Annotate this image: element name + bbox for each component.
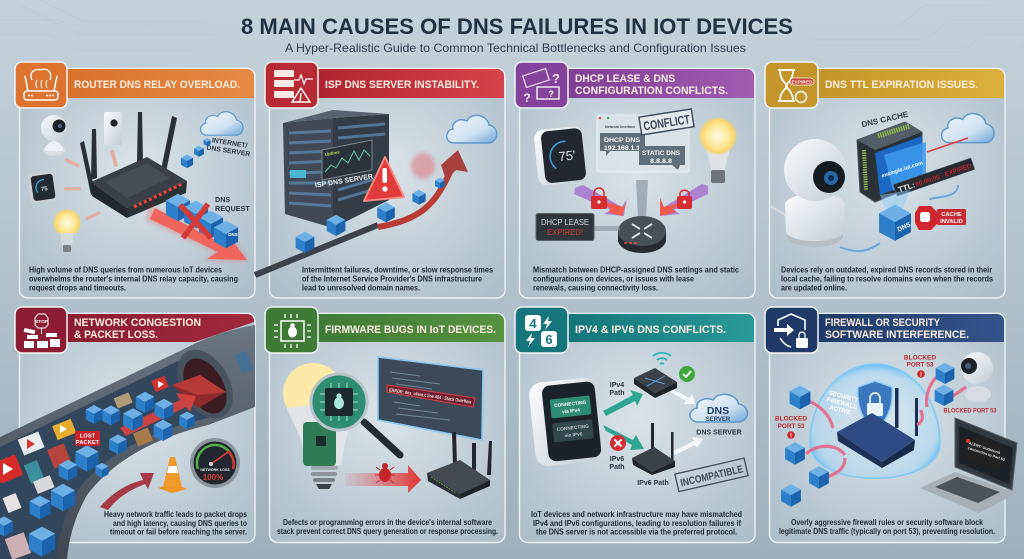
icon: light bulb xyxy=(53,209,81,252)
labels: paths: IPv6 Path xyxy=(637,480,669,487)
gauge: network loss: NETWORK LOSS xyxy=(200,468,230,472)
description: ISP instability: lead to unresolved domain names. xyxy=(302,282,420,292)
icon: laptop: ALERT: Outbound xyxy=(968,441,1001,455)
icon: 4 and 6: 6 xyxy=(545,332,553,347)
icon: network cards: ? xyxy=(552,71,560,86)
icon: device with connecting screens: via IPv4 xyxy=(562,407,581,415)
icon: device with connecting screens: CONNECTING xyxy=(556,424,589,433)
red X xyxy=(180,204,211,238)
red failure arrow xyxy=(378,150,468,227)
icon: thermostat xyxy=(533,126,588,186)
description: TTL expiry: are updated online. xyxy=(781,282,847,292)
dropped DNS request cubes xyxy=(166,194,238,248)
description: router overload xyxy=(29,264,238,292)
red overflow arrow xyxy=(146,205,248,261)
icon: router xyxy=(80,112,187,218)
label: blocked port left: PORT 53 xyxy=(777,423,805,430)
panel: router DNS relay overload xyxy=(15,62,255,298)
illustration: congested tube xyxy=(0,325,255,559)
icon: thermostat xyxy=(27,170,57,204)
icon: device with connecting screens xyxy=(528,377,602,467)
teal arrows xyxy=(603,390,644,450)
heading: router DNS relay overload: ROUTER DNS RELAY OVERLOAD. xyxy=(74,79,240,91)
icon: network cards: ? xyxy=(548,89,554,99)
illustration: firmware xyxy=(283,357,492,499)
label: blocked port left xyxy=(775,416,807,440)
labels: paths: Path xyxy=(609,390,625,397)
label: security firewall active: FIREWALL xyxy=(826,397,858,411)
description: DHCP conflict xyxy=(533,264,739,292)
chart: uptime monitor: Uptime xyxy=(324,149,341,157)
icon: thermostat: 75 xyxy=(41,186,49,193)
heading: network congestion xyxy=(74,317,201,341)
glow beam xyxy=(880,190,910,215)
label: blocked port top xyxy=(904,354,936,378)
illustration: ISP server xyxy=(255,110,497,275)
icon: large camera xyxy=(769,139,846,247)
description: TTL expiry xyxy=(781,264,993,292)
label: DNS cache: DNS CACHE xyxy=(861,110,910,129)
icon: cloud internet xyxy=(201,112,243,135)
network interface window xyxy=(597,109,694,172)
description: DHCP conflict: renewals, causing connectivity loss. xyxy=(533,282,658,292)
description: network congestion: Heavy network traffic leads to packet drops xyxy=(104,509,247,519)
tube interior xyxy=(0,361,212,559)
icon: laptop xyxy=(920,418,1017,513)
callout: static DNS: STATIC DNS xyxy=(642,150,681,157)
description: DHCP conflict: Mismatch between DHCP-assigned DNS settings and static xyxy=(533,264,739,274)
illustration: router overload xyxy=(27,112,252,261)
label: DNS server: DNS SERVER xyxy=(696,430,742,436)
icon: DNS server cloud: DNS xyxy=(707,405,729,417)
stamp: conflict: CONFLICT xyxy=(642,112,691,133)
panel: IPv4 and IPv6 conflicts xyxy=(515,307,755,542)
DNS request cube xyxy=(879,205,913,241)
heading: DHCP lease and DNS conflicts: DHCP LEASE & DNS xyxy=(575,73,675,85)
illustration: dual stack xyxy=(528,353,748,492)
icon: stop and congested packets xyxy=(15,307,67,353)
labels: paths: IPv4 xyxy=(610,382,624,389)
icon: device with connecting screens: CONNECTING xyxy=(554,400,587,409)
icon: shield with lock xyxy=(765,307,818,353)
blue connector xyxy=(840,185,958,251)
illustration: DHCP conflict xyxy=(533,109,737,253)
TTL expired banner: TTL: xyxy=(897,180,916,195)
heading: DHCP lease and DNS conflicts: CONFIGURATION CONFLICTS. xyxy=(575,85,728,97)
small DNS cubes xyxy=(181,138,211,168)
icon: wifi xyxy=(653,353,671,364)
DNS cache box xyxy=(857,122,926,202)
description: router overload: overwhelms the router's internal DNS relay capacity, causing xyxy=(29,274,238,284)
heading: network congestion: & PACKET LOSS. xyxy=(74,329,158,341)
icon: IPv6 router xyxy=(632,423,675,475)
icon: DNS server cloud: SERVER xyxy=(706,417,731,423)
description: IPv4 IPv6 xyxy=(531,509,742,536)
icon: red padlocks xyxy=(591,188,692,209)
label: lost packet: PACKET xyxy=(76,440,100,446)
icon: 4 and 6: 4 xyxy=(529,316,537,331)
panel: firewall interference xyxy=(765,307,1017,542)
smoke xyxy=(411,153,435,179)
callout: DHCP DNS: 192.168.1.1 xyxy=(604,145,640,152)
icon: red X xyxy=(610,435,626,451)
heading: ISP DNS server instability: ISP DNS SERVER INSTABILITY. xyxy=(325,79,479,91)
label: blocked port right: BLOCKED PORT 53 xyxy=(944,408,997,414)
panel: ISP DNS server instability xyxy=(255,62,505,298)
label: internet DNS server: DNS SERVER xyxy=(206,145,251,158)
icon: router xyxy=(427,432,492,499)
description: ISP instability xyxy=(302,264,493,292)
red arrow xyxy=(345,465,421,493)
icon: server with alert xyxy=(265,62,318,108)
label: internet DNS server: INTERNET/ xyxy=(211,137,248,150)
icon: traffic cone xyxy=(158,457,187,493)
icon: warning triangle xyxy=(364,157,404,201)
label: internet DNS server xyxy=(206,137,252,158)
description: IPv4 IPv6: IPv4 and IPv6 configurations, leading to resolution failures if xyxy=(533,518,741,528)
shield xyxy=(858,381,892,430)
dropped DNS request cubes: DNS xyxy=(228,232,238,237)
description: firmware xyxy=(277,517,498,536)
pink blocked flows xyxy=(806,376,966,478)
gauge: network loss xyxy=(190,438,240,488)
panel: firmware bugs xyxy=(265,307,505,542)
tube mouth xyxy=(166,340,253,428)
description: network congestion: timeout or fail before reaching the server. xyxy=(110,526,247,536)
description: firmware: Defects or programming errors in the device's internal software xyxy=(283,517,492,527)
label: blocked port left: ! xyxy=(790,434,792,440)
illustration: TTL expiry xyxy=(769,110,994,251)
icon: thermostat: 75' xyxy=(558,147,576,164)
icon: network cards xyxy=(515,62,568,108)
red flow arrow xyxy=(120,393,196,436)
label: lost packet xyxy=(75,431,100,446)
conflict arrows xyxy=(574,184,708,216)
description: IPv4 IPv6: IoT devices and network infrastructure may have mismatched xyxy=(531,509,742,519)
red laser xyxy=(927,138,968,152)
security dome xyxy=(810,364,940,478)
DNS cache box: example.iot.com xyxy=(881,160,924,179)
code window: ERROR: dns_client.c line 404 - Stack Overflow xyxy=(389,388,472,406)
white arrows xyxy=(670,389,703,455)
DNS cubes along cable xyxy=(296,178,445,253)
label: blocked port top: BLOCKED xyxy=(904,354,936,362)
label: DHCP lease expired: EXPIRED! xyxy=(547,228,583,237)
icon: blue router xyxy=(837,388,918,468)
labels: paths: IPv6 xyxy=(610,456,624,463)
icon: wall sensor xyxy=(104,112,122,145)
icon: light bulb xyxy=(699,117,737,183)
heading: DHCP lease and DNS conflicts xyxy=(575,73,728,97)
label: blocked port left: BLOCKED xyxy=(775,416,807,422)
heading: firmware bugs: FIRMWARE BUGS IN IoT DEVICES. xyxy=(325,324,496,336)
icon: stop sign xyxy=(915,206,938,230)
icon: laptop: connection to Port 53 xyxy=(967,446,1005,462)
icon: hourglass expired: EXPIRED xyxy=(791,80,813,86)
label: lost packet: LOST xyxy=(80,434,96,440)
cable xyxy=(255,225,378,275)
tube outer xyxy=(0,325,255,559)
callout: DHCP DNS: DHCP DNS xyxy=(604,137,641,144)
panel: DHCP lease and DNS conflicts xyxy=(515,62,755,298)
code window xyxy=(378,357,483,440)
icon: chip with bug xyxy=(265,307,318,353)
labels: paths xyxy=(609,382,669,487)
icon: network cards: ? xyxy=(523,91,531,105)
callout: static DNS: 8.8.8.8 xyxy=(650,158,672,165)
label: DHCP lease expired: DHCP LEASE xyxy=(541,218,589,227)
label: DNS request xyxy=(215,195,250,213)
packets from devices xyxy=(64,150,118,221)
label: cache invalid: INVALID xyxy=(940,219,963,225)
description: IPv4 IPv6: the DNS server is not accessible via the preferred protocol. xyxy=(536,526,737,536)
label: DHCP lease expired xyxy=(536,214,594,240)
label: DNS request: REQUEST xyxy=(215,204,250,213)
icon: bulb with circuit xyxy=(283,363,350,489)
icon: hourglass expired xyxy=(765,62,818,108)
description: firmware: stack prevent correct DNS query generation or response processing. xyxy=(277,526,498,536)
heading: firewall interference: FIREWALL OR SECURITY xyxy=(825,317,941,329)
network interface window: Network Interface xyxy=(605,125,635,129)
label: security firewall active: SECURITY xyxy=(828,390,859,404)
heading: IPv4 and IPv6 conflicts: IPV4 & IPV6 DNS CONFLICTS. xyxy=(575,324,726,336)
subtitle: A Hyper-Realistic Guide to Common Technical Bottlenecks and Configuration Issues xyxy=(285,41,746,55)
gauge: network loss: 100% xyxy=(203,473,223,482)
icon: stop and congested packets: STOP xyxy=(35,319,48,324)
icon: router with hot cloud xyxy=(15,62,67,108)
TTL expired banner xyxy=(893,158,975,196)
DNS cubes xyxy=(781,363,954,507)
labels: paths: Path xyxy=(609,464,625,471)
description: ISP instability: Intermittent failures, downtime, or slow response times xyxy=(302,264,493,274)
DNS request cube: DNS xyxy=(897,221,913,234)
dark red arrow xyxy=(100,473,154,510)
connector to lease box xyxy=(594,226,620,231)
stamp: incompatible: INCOMPATIBLE xyxy=(679,463,744,489)
icon: camera xyxy=(961,352,993,402)
heading: DNS TTL expiration: DNS TTL EXPIRATION ISSUES. xyxy=(825,79,978,91)
callout: static DNS xyxy=(639,146,685,170)
panel: DNS TTL expiration xyxy=(765,62,1005,298)
label: blocked port top: PORT 53 xyxy=(906,362,934,368)
callout: DHCP DNS xyxy=(600,133,645,156)
description: network congestion xyxy=(104,509,247,536)
traffic tiles xyxy=(0,376,195,559)
description: firewall: Overly aggressive firewall rules or security software block xyxy=(791,517,983,527)
heading: firewall interference: SOFTWARE INTERFERENCE. xyxy=(825,329,969,341)
description: router overload: High volume of DNS queries from numerous IoT devices xyxy=(29,264,222,274)
icon: bug xyxy=(375,463,395,483)
icon: device with connecting screens: via IPv6 xyxy=(564,431,583,439)
heading: firewall interference xyxy=(825,317,969,341)
beam to gateway xyxy=(636,180,648,218)
icon: cloud xyxy=(447,115,497,143)
description: DHCP conflict: configurations on devices, or issues with lease xyxy=(533,274,694,284)
icon: magnifier xyxy=(311,374,400,455)
illustration: firewall xyxy=(775,352,1017,513)
label: cache invalid: CACHE xyxy=(941,212,962,218)
icon: server rack xyxy=(283,110,389,228)
label: security firewall active xyxy=(824,390,859,418)
TTL expired banner: 00:00:00 - EXPIRED xyxy=(915,163,973,189)
label: DNS request: DNS xyxy=(215,195,230,204)
label: cache invalid xyxy=(937,209,966,225)
description: ISP instability: of the Internet Service Provider's DNS infrastructure xyxy=(302,274,482,284)
description: network congestion: and high latency, causing DNS queries to xyxy=(113,518,247,528)
label: ISP DNS server: ISP DNS SERVER xyxy=(315,173,374,190)
panel: network congestion xyxy=(0,307,255,559)
icon: IoT camera xyxy=(41,115,67,156)
label: blocked port top: ! xyxy=(920,372,922,378)
icon: check xyxy=(679,366,695,382)
icon: DNS server cloud xyxy=(690,394,747,423)
heading: network congestion: NETWORK CONGESTION xyxy=(74,317,201,329)
icon: IPv4 router xyxy=(634,368,677,398)
description: router overload: request drops and timeouts. xyxy=(29,282,126,292)
chart: uptime monitor xyxy=(322,140,372,180)
description: firewall xyxy=(779,517,995,536)
title: 8 MAIN CAUSES OF DNS FAILURES IN IOT DEVICES xyxy=(241,14,793,39)
label: security firewall active: ACTIVE xyxy=(829,405,851,416)
icon: gateway router xyxy=(618,216,666,253)
icon: 4 and 6 xyxy=(515,307,568,353)
icon: cloud xyxy=(941,114,994,143)
